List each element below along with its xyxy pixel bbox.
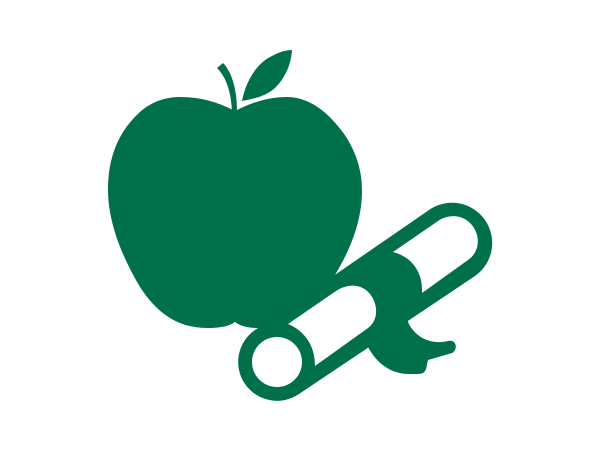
scroll ribbon tail (368, 318, 456, 374)
scroll end circle (252, 337, 302, 387)
apple leaf (242, 50, 292, 101)
apple body (108, 97, 362, 328)
scroll upper opening (393, 216, 478, 293)
apple stem (217, 63, 237, 111)
icon: diploma scroll (238, 203, 492, 401)
icon: apple (108, 50, 362, 328)
scroll outline (238, 203, 492, 401)
scroll middle opening (288, 286, 376, 366)
